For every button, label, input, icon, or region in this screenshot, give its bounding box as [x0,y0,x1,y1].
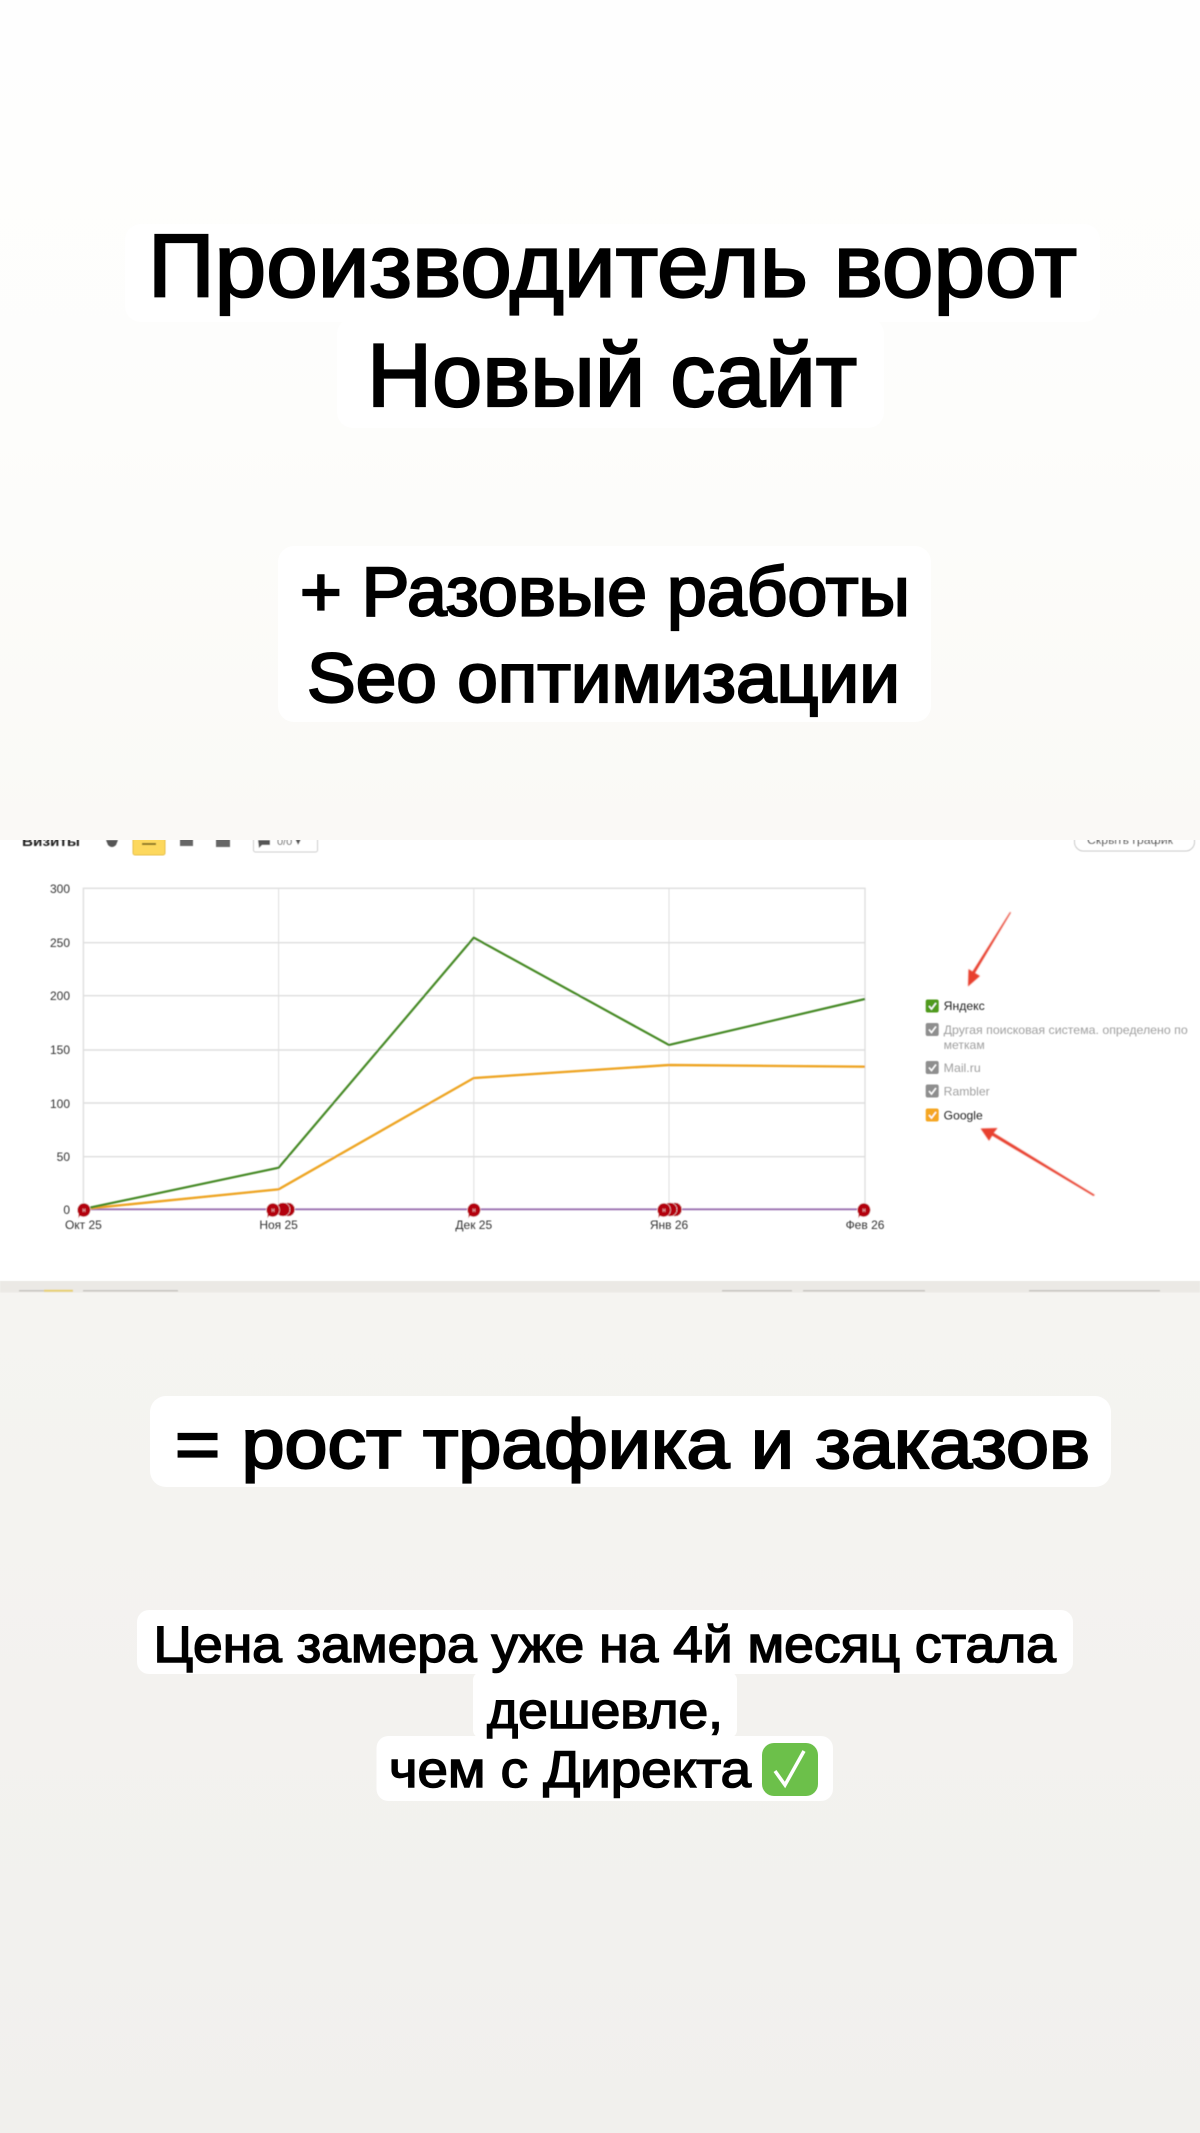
y axis labels [50,882,70,1217]
line chart: н [862,1208,866,1214]
title block [125,216,1100,428]
line chart: н [271,1208,275,1214]
legend item: Mail.ru: Mail.ru [944,1061,981,1075]
title block: Производитель ворот [148,216,1077,316]
x axis labels: Окт 25 [65,1218,102,1232]
legend item: Google [926,1108,983,1122]
baseline series [83,1208,865,1210]
line chart: н [472,1208,476,1214]
yandex series [83,938,865,1209]
legend item: Яндекс: Яндекс [944,999,985,1013]
icon: green check mark [762,1743,818,1796]
y axis labels: 200 [50,989,70,1003]
x axis labels: Фев 26 [846,1218,885,1232]
x axis labels [65,1218,885,1232]
y axis labels: 150 [50,1043,70,1057]
measurement price note: чем с Директа [389,1741,752,1798]
panel: analytics screenshot [0,826,1200,1281]
y axis labels: 100 [50,1097,70,1111]
y axis labels: 300 [50,882,70,896]
measurement price note: дешевле, [487,1682,723,1739]
subtitle: one-off works [278,546,931,722]
y axis labels: 250 [50,936,70,950]
cropped toolbar [22,840,1196,856]
arrow: to Google [982,1128,1094,1196]
chart grid [83,888,865,1209]
legend item: other search engine: Другая поисковая система. определено по [944,1023,1188,1037]
legend [926,999,1188,1122]
measurement price note [137,1610,1073,1801]
google series [83,1065,865,1209]
line chart [50,882,885,1232]
subtitle: one-off works: + Разовые работы [300,552,910,630]
cropped toolbar: Визиты [22,833,80,849]
y axis labels: 0 [63,1203,70,1217]
arrow: to Яндекс [968,912,1011,986]
legend item: other search engine: меткам [944,1038,985,1052]
cropped lower toolbar strip [0,1281,1200,1292]
x axis labels: Дек 25 [455,1218,492,1232]
title block: Новый сайт [367,325,857,425]
x axis labels: Ноя 25 [259,1218,298,1232]
legend item: Mail.ru [926,1061,981,1075]
legend item: Яндекс [926,999,985,1013]
legend item: Rambler: Rambler [944,1084,990,1098]
cropped toolbar: 0/0 ▾ [277,836,301,848]
line chart: н [662,1208,666,1214]
y axis labels: 50 [57,1150,70,1164]
subtitle: one-off works: Seo оптимизации [307,639,900,717]
annotation markers [77,1202,871,1219]
line chart: н [82,1208,86,1214]
x axis labels: Янв 26 [650,1218,688,1232]
legend item: other search engine [926,1023,1188,1052]
cropped toolbar: Скрыть график [1087,833,1174,847]
measurement price note: Цена замера уже на 4й месяц стала [154,1616,1057,1673]
legend item: Google: Google [944,1108,983,1122]
result statement: = рост трафика и заказов [175,1405,1090,1483]
